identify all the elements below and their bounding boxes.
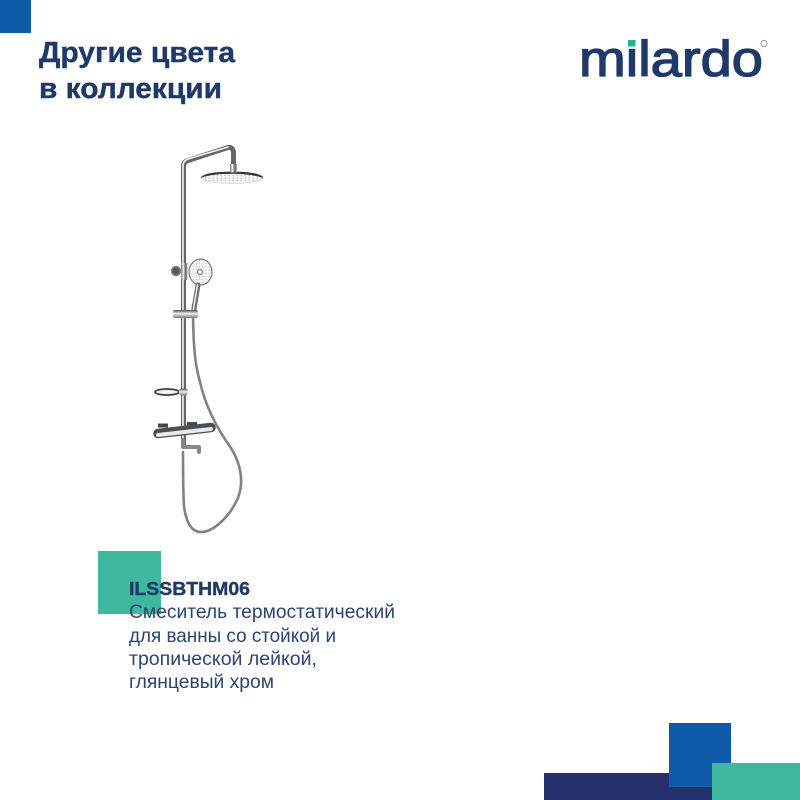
rail and shower arm <box>184 147 234 445</box>
product description: тропической лейкой, <box>129 649 317 670</box>
rain shower head <box>201 164 263 184</box>
decorative square: teal behind product text <box>98 551 161 614</box>
hand shower <box>172 259 212 312</box>
decorative square: top left <box>0 0 31 33</box>
bath spout <box>183 440 199 452</box>
product description <box>129 602 395 693</box>
decorative squares: bottom right <box>544 723 800 800</box>
product description: глянцевый хром <box>129 672 274 693</box>
soap dish <box>155 388 188 396</box>
heading <box>39 37 236 105</box>
logo: milardo: milardo <box>579 31 763 87</box>
slider bracket <box>173 310 198 318</box>
product description: для ванны со стойкой и <box>129 626 336 647</box>
heading: Другие цвета <box>39 37 236 69</box>
thermostatic mixer <box>158 422 211 435</box>
heading: в коллекции <box>39 73 222 105</box>
product image: shower column <box>155 147 263 532</box>
product code: ILSSBTHM06 <box>129 578 250 599</box>
product description: Смеситель термостатический <box>129 602 395 623</box>
hose <box>183 305 241 532</box>
